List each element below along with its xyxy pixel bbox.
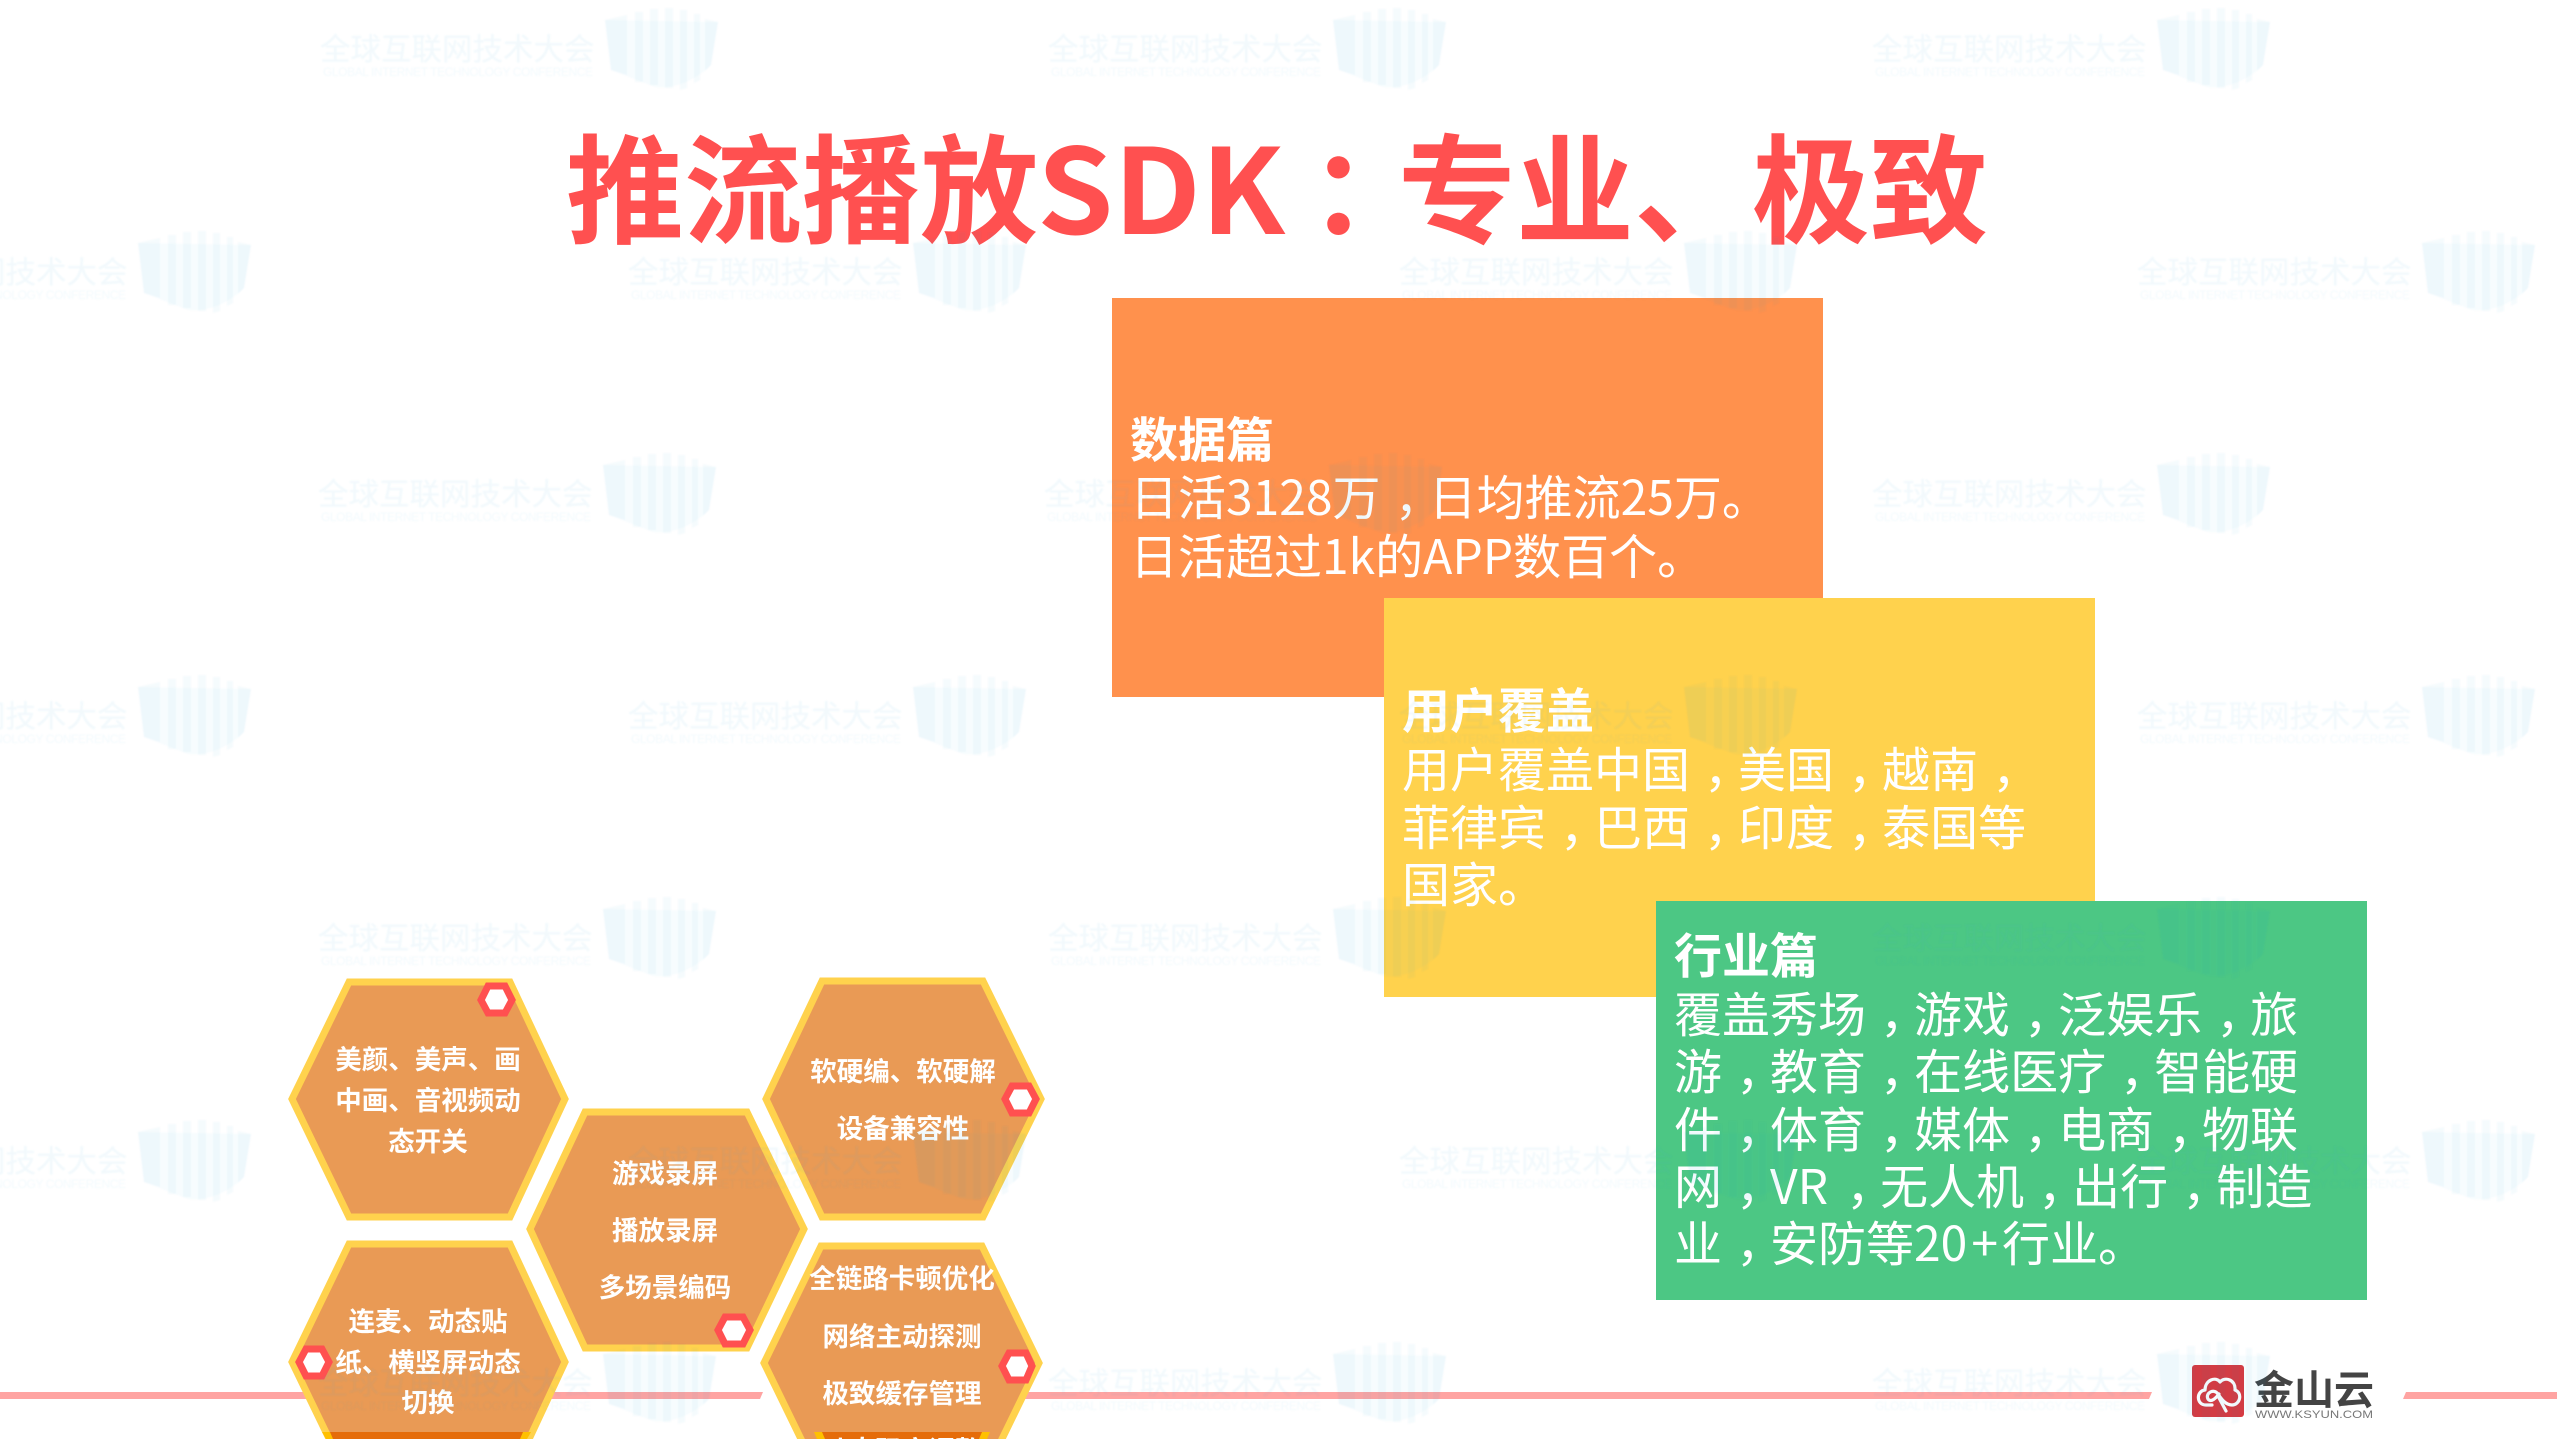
panel text: industry: 件 ，体育 ，媒体 ，电商 ，物联 xyxy=(1674,1091,2298,1161)
hexagon marker xyxy=(1002,1353,1032,1380)
watermark overlay: 全球互联网技术大会 xyxy=(1872,25,2146,69)
panel: data xyxy=(1112,298,1823,697)
panel text: data: 日活超过1k的APP数百个。 xyxy=(1130,518,1705,588)
watermark overlay: GLOBAL INTERNET TECHNOLOGY CONFERENCE xyxy=(321,954,591,968)
dark band xyxy=(322,1432,531,1439)
panel text: user coverage: 菲律宾 ，巴西 ，印度 ，泰国等 xyxy=(1402,789,2026,859)
hexagon text: co-streaming: 切换 xyxy=(402,1381,455,1420)
hexagon text: encoding compatibility: 设备兼容性 xyxy=(837,1107,969,1146)
watermark overlay: GLOBAL INTERNET TECHNOLOGY CONFERENCE xyxy=(1402,1177,1672,1191)
watermark overlay: 全球互联网技术大会 xyxy=(318,470,592,514)
watermark overlay: GLOBAL INTERNET TECHNOLOGY CONFERENCE xyxy=(321,510,591,524)
watermark overlay: 全球互联网技术大会 xyxy=(1872,1359,2146,1403)
watermark overlay: 全球互联网技术大会 xyxy=(628,1137,902,1181)
hexagon text: network optimisation: 网络主动探测 xyxy=(822,1315,982,1354)
hexagon text: screen recording: 多场景编码 xyxy=(599,1266,731,1305)
hexagon: network optimisation xyxy=(764,1246,1039,1439)
watermark overlay: GLOBAL INTERNET TECHNOLOGY CONFERENCE xyxy=(1051,1399,1321,1413)
logo wordmark: 金山云 xyxy=(2254,1358,2374,1416)
watermark overlay: GLOBAL INTERNET TECHNOLOGY CONFERENCE xyxy=(1047,510,1317,524)
watermark overlay: GLOBAL INTERNET TECHNOLOGY CONFERENCE xyxy=(1402,288,1672,302)
hexagon text: screen recording: 游戏录屏 xyxy=(612,1152,718,1191)
watermark overlay: GLOBAL INTERNET TECHNOLOGY CONFERENCE xyxy=(631,1177,901,1191)
logo url: WWW.KSYUN.COM xyxy=(2255,1409,2373,1421)
watermark overlay: 全球互联网技术大会 xyxy=(2137,248,2412,292)
hexagon marker xyxy=(1005,1086,1036,1113)
title: SDK xyxy=(1037,97,1286,268)
logo: Kingsoft Cloud xyxy=(2192,1358,2374,1421)
watermark overlay: GLOBAL INTERNET TECHNOLOGY CONFERENCE xyxy=(1875,1399,2145,1413)
watermark overlay: GLOBAL INTERNET TECHNOLOGY CONFERENCE xyxy=(2140,1177,2410,1191)
hexagon marker xyxy=(481,986,512,1013)
watermark overlay: 全球互联网技术大会 xyxy=(628,692,902,736)
hexagon text: beauty features: 美颜、美声、画 xyxy=(335,1038,521,1077)
panel text: user coverage: 用户覆盖中国 ，美国 ，越南 ， xyxy=(1402,731,2040,801)
watermark overlay: GLOBAL INTERNET TECHNOLOGY CONFERENCE xyxy=(1051,65,1321,79)
title: 推流播放 xyxy=(566,97,1038,268)
watermark overlay: 全球互联网技术大会 xyxy=(320,25,594,69)
watermark overlay: 全球互联网技术大会 xyxy=(2137,692,2412,736)
panel: user coverage xyxy=(1384,598,2095,997)
watermark overlay: GLOBAL INTERNET TECHNOLOGY CONFERENCE xyxy=(1875,510,2145,524)
hexagon text: co-streaming: 纸、横竖屏动态 xyxy=(335,1341,521,1380)
watermark overlay: 全球互联网技术大会 xyxy=(1399,1137,1674,1181)
watermark overlay: 全球互联网技术大会 xyxy=(318,914,592,958)
watermark overlay: GLOBAL INTERNET TECHNOLOGY CONFERENCE xyxy=(631,732,901,746)
watermark overlay: 全球互联网技术大会 xyxy=(1044,470,1318,514)
hexagon text: network optimisation: 全链路卡顿优化 xyxy=(809,1257,995,1296)
watermark overlay: GLOBAL INTERNET TECHNOLOGY CONFERENCE xyxy=(323,65,593,79)
panel text: industry: 覆盖秀场 ，游戏 ，泛娱乐 ，旅 xyxy=(1674,976,2298,1046)
title: 专业、极致 xyxy=(1398,97,1988,268)
watermark overlay: 全球互联网技术大会 xyxy=(318,1359,592,1403)
watermark overlay: 全球互联网技术大会 xyxy=(2137,1137,2412,1181)
panel text: industry: 游 ，教育 ，在线医疗 ，智能硬 xyxy=(1674,1033,2298,1103)
hexagon text: encoding compatibility: 软硬编、软硬解 xyxy=(810,1050,996,1089)
panel text: industry: 网 ，VR ，无人机 ，出行 ，制造 xyxy=(1674,1148,2312,1218)
watermark overlay: 全球互联网技术大会 xyxy=(628,248,902,292)
watermark overlay: 全球互联网技术大会 xyxy=(1048,25,1322,69)
watermark overlay: GLOBAL INTERNET TECHNOLOGY CONFERENCE xyxy=(1051,954,1321,968)
hexagon text: beauty features: 态开关 xyxy=(388,1120,468,1159)
hexagon marker xyxy=(718,1317,750,1344)
hexagon: screen recording xyxy=(530,1112,804,1348)
watermark overlay: 全球互联网技术大会 xyxy=(1872,470,2146,514)
hexagon text: co-streaming: 连麦、动态贴 xyxy=(348,1300,508,1339)
panel heading: data: 数据篇 xyxy=(1130,401,1274,471)
title: ： xyxy=(1309,97,1427,268)
panel heading: user coverage: 用户覆盖 xyxy=(1402,672,1594,742)
watermark overlay: GLOBAL INTERNET TECHNOLOGY CONFERENCE xyxy=(631,288,901,302)
watermark overlay: 全球互联网技术大会 xyxy=(1048,1359,1322,1403)
watermark overlay: GLOBAL INTERNET TECHNOLOGY CONFERENCE xyxy=(2140,288,2410,302)
hexagon: encoding compatibility xyxy=(766,981,1041,1217)
dark band xyxy=(814,1432,990,1439)
icon: cloud xyxy=(2198,1379,2240,1411)
panel heading: industry: 行业篇 xyxy=(1674,917,1818,987)
watermark overlay: GLOBAL INTERNET TECHNOLOGY CONFERENCE xyxy=(1875,954,2145,968)
watermark overlay: 全球互联网技术大会 xyxy=(1048,914,1322,958)
hexagon text: screen recording: 播放录屏 xyxy=(612,1209,718,1248)
watermark overlay: GLOBAL INTERNET TECHNOLOGY CONFERENCE xyxy=(2140,732,2410,746)
footer line xyxy=(0,1392,2557,1399)
hexagon marker xyxy=(299,1349,329,1376)
hexagon: co-streaming xyxy=(292,1244,565,1439)
hexagon: beauty features xyxy=(292,982,565,1217)
hexagon text: beauty features: 中画、音视频动 xyxy=(335,1079,521,1118)
panel text: industry: 业 ，安防等20+行业。 xyxy=(1674,1205,2146,1275)
panel: industry xyxy=(1656,901,2367,1300)
watermark overlay: GLOBAL INTERNET TECHNOLOGY CONFERENCE xyxy=(1875,65,2145,79)
watermark overlay: GLOBAL INTERNET TECHNOLOGY CONFERENCE xyxy=(1402,732,1672,746)
watermark overlay: 全球互联网技术大会 xyxy=(1872,914,2146,958)
watermark overlay: 全球互联网技术大会 xyxy=(1399,692,1674,736)
panel text: data: 日活3128万 ，日均推流25万。 xyxy=(1130,459,1770,529)
hexagon text: network optimisation: 极致缓存管理 xyxy=(822,1372,982,1411)
watermark overlay: GLOBAL INTERNET TECHNOLOGY CONFERENCE xyxy=(321,1399,591,1413)
watermark overlay: 全球互联网技术大会 xyxy=(1399,248,1674,292)
panel text: user coverage: 国家。 xyxy=(1402,846,1546,916)
